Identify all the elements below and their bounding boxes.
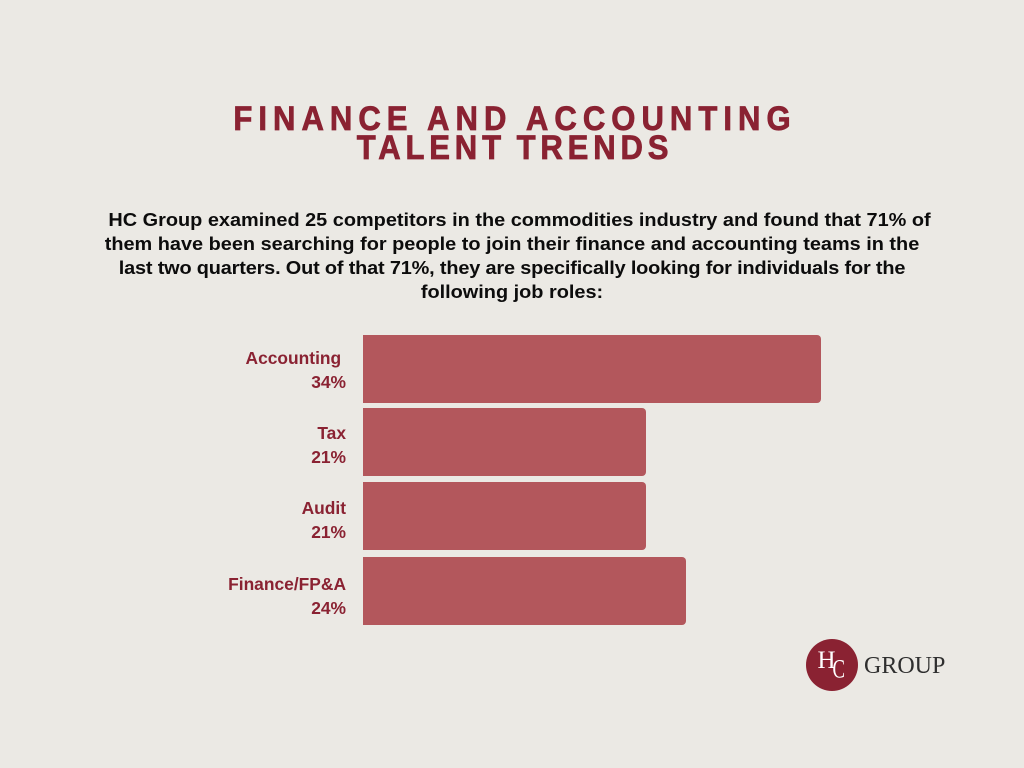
title: [233, 100, 797, 166]
label: tax: 21%: [311, 447, 346, 467]
label: accounting: 34%: [311, 372, 346, 392]
logo: HC Group: [806, 639, 945, 691]
label: finance: Finance/FP&A: [228, 574, 346, 594]
label: finance: [228, 574, 346, 618]
bar: finance: [363, 556, 686, 624]
label: accounting: [246, 348, 346, 392]
intro text block: HC Group examined 25 competitors in the commodities industry and found that 71% of: [108, 210, 931, 230]
intro text block: last two quarters. Out of that 71%, they are specifically looking for individuals for the: [119, 258, 905, 278]
title: FINANCE AND ACCOUNTING: [233, 100, 797, 138]
intro text block: them have been searching for people to join their finance and accounting teams in the: [105, 234, 919, 254]
label: audit: [302, 498, 346, 542]
bar: tax: [363, 408, 646, 476]
bar: accounting: [363, 334, 821, 402]
bar chart: [228, 335, 821, 625]
bar: audit: [363, 482, 646, 550]
logo circle: C: [832, 655, 845, 683]
logo circle: [806, 639, 858, 691]
intro text block: following job roles:: [421, 282, 603, 302]
logo wordmark: GROUP: [864, 653, 945, 679]
label: accounting: Accounting: [246, 348, 341, 368]
label: tax: Tax: [317, 423, 346, 443]
logo circle: H: [818, 647, 836, 674]
label: audit: 21%: [311, 522, 346, 542]
title: TALENT TRENDS: [357, 128, 673, 166]
label: tax: [311, 423, 346, 467]
intro text block: [105, 210, 931, 302]
label: finance: 24%: [311, 598, 346, 618]
label: audit: Audit: [302, 498, 346, 518]
